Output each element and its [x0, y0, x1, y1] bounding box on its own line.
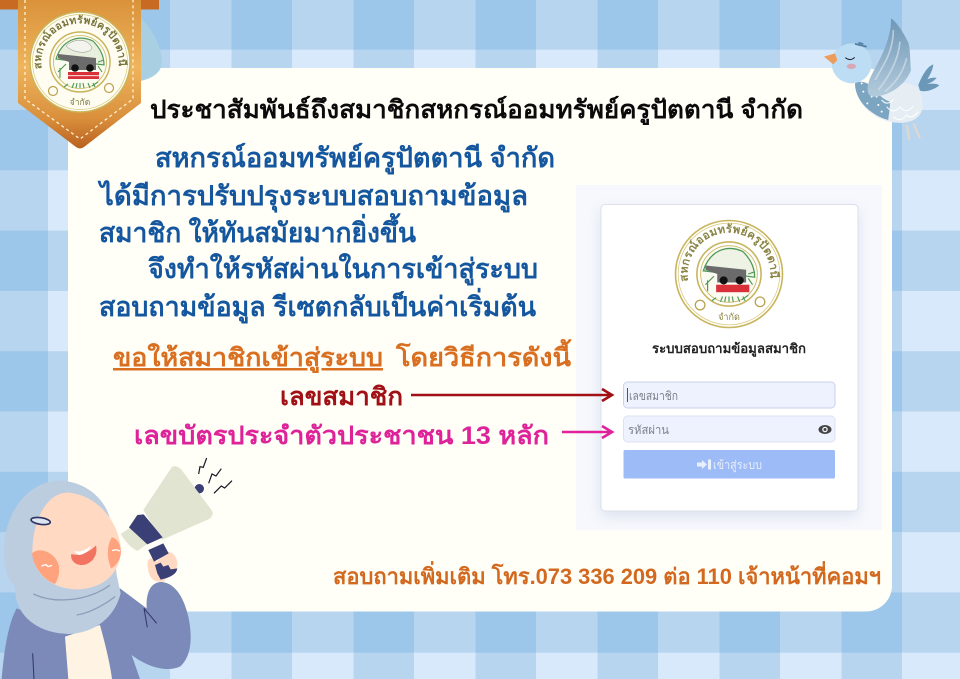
ribbon badge: [0, 0, 159, 148]
member number input: [624, 382, 835, 408]
seal logo: [29, 11, 131, 113]
line 4: จึงทำให้รหัสผ่านในการเข้าสู่ระบบ: [148, 253, 538, 286]
login icon: [697, 460, 711, 470]
announcement text: [97, 142, 555, 324]
input caret: [627, 388, 628, 402]
login button: [624, 450, 835, 478]
bird eye: [845, 57, 855, 60]
national id label: เลขบัตรประจำตัวประชาชน 13 หลัก: [134, 422, 549, 450]
member number label: เลขสมาชิก: [280, 383, 403, 411]
arrow: national id: [562, 426, 612, 438]
line 1: สหกรณ์ออมทรัพย์ครูปัตตานี จำกัด: [155, 142, 555, 175]
megaphone tail: [121, 527, 147, 551]
megaphone knob: [195, 484, 204, 493]
mouth: [71, 545, 96, 565]
login card: [601, 204, 858, 511]
seal logo: สหกรณ์ออมทรัพย์ครูปัตตานี: [34, 14, 128, 69]
password placeholder: รหัสผ่าน: [628, 423, 669, 437]
megaphone: [121, 466, 213, 582]
screenshot background: [576, 185, 882, 530]
login seal logo: [674, 220, 784, 328]
bird beak: [824, 53, 837, 64]
instruction heading: [113, 338, 572, 374]
title: ประชาสัมพันธ์ถึงสมาชิกสหกรณ์ออมทรัพย์ครูปัตตานี จำกัด: [150, 95, 803, 126]
megaphone handle lower: [155, 563, 177, 580]
icon: bird: [824, 18, 939, 140]
jacket: [2, 582, 191, 679]
wing streaks: [875, 30, 907, 92]
login seal logo: สหกรณ์ออมทรัพย์ครูปัตตานี: [680, 223, 780, 282]
scarf fold lines: [33, 585, 115, 615]
line 2: ได้มีการปรับปรุงระบบสอบถามข้อมูล: [97, 180, 528, 213]
right cheek mark: [112, 550, 120, 551]
face: [32, 493, 121, 589]
panel: notice card: [68, 68, 892, 612]
left cheek mark: [41, 565, 52, 567]
bird crest: [855, 43, 867, 47]
password input: [624, 416, 835, 442]
right cheek: [108, 537, 121, 568]
login heading: ระบบสอบถามข้อมูลสมาชิก: [652, 341, 806, 357]
badge stitching: [25, 0, 133, 139]
hand: [147, 552, 177, 582]
megaphone handle upper: [148, 543, 169, 562]
megaphone band: [129, 514, 163, 544]
bird body: [855, 83, 923, 123]
hair clip: [31, 516, 51, 526]
bird cheek: [847, 64, 856, 69]
icon: eye: [818, 425, 832, 434]
bird wing: [868, 18, 911, 97]
login screenshot: [576, 185, 882, 530]
character with megaphone: [2, 458, 232, 679]
underlined instruction: ขอให้สมาชิกเข้าสู่ระบบ: [113, 342, 383, 374]
badge shield: [18, 0, 141, 148]
teeth: [74, 546, 91, 555]
method text: โดยวิธีการดังนี้: [395, 338, 572, 372]
left cheek: [32, 550, 59, 584]
line 3: สมาชิก ให้ทันสมัยมากยิ่งขึ้น: [99, 212, 417, 248]
member number placeholder: เลขสมาชิก: [629, 389, 678, 403]
bird head: [832, 43, 872, 83]
seal logo: จำกัด: [70, 97, 90, 107]
login seal logo: จำกัด: [718, 312, 740, 322]
bird legs: [907, 123, 920, 140]
bird tail: [918, 64, 939, 91]
sound lines: [199, 458, 232, 493]
jacket seam: [33, 653, 34, 679]
contact line: สอบถามเพิ่มเติม โทร.073 336 209 ต่อ 110 เจ้าหน้าที่คอมฯ: [333, 560, 881, 589]
body scallops: [882, 99, 918, 120]
card shadow: [601, 210, 858, 516]
line 5: สอบถามข้อมูล รีเซตกลับเป็นค่าเริ่มต้น: [99, 287, 537, 324]
headscarf: [4, 481, 121, 634]
decoration: watercolor blob: [140, 17, 162, 81]
megaphone cone: [143, 466, 213, 540]
shirt: [65, 625, 112, 679]
sleeve fold: [144, 608, 157, 627]
ribbon tabs: [0, 0, 159, 10]
login button label: เข้าสู่ระบบ: [713, 458, 762, 473]
arrow: member number: [411, 389, 612, 401]
